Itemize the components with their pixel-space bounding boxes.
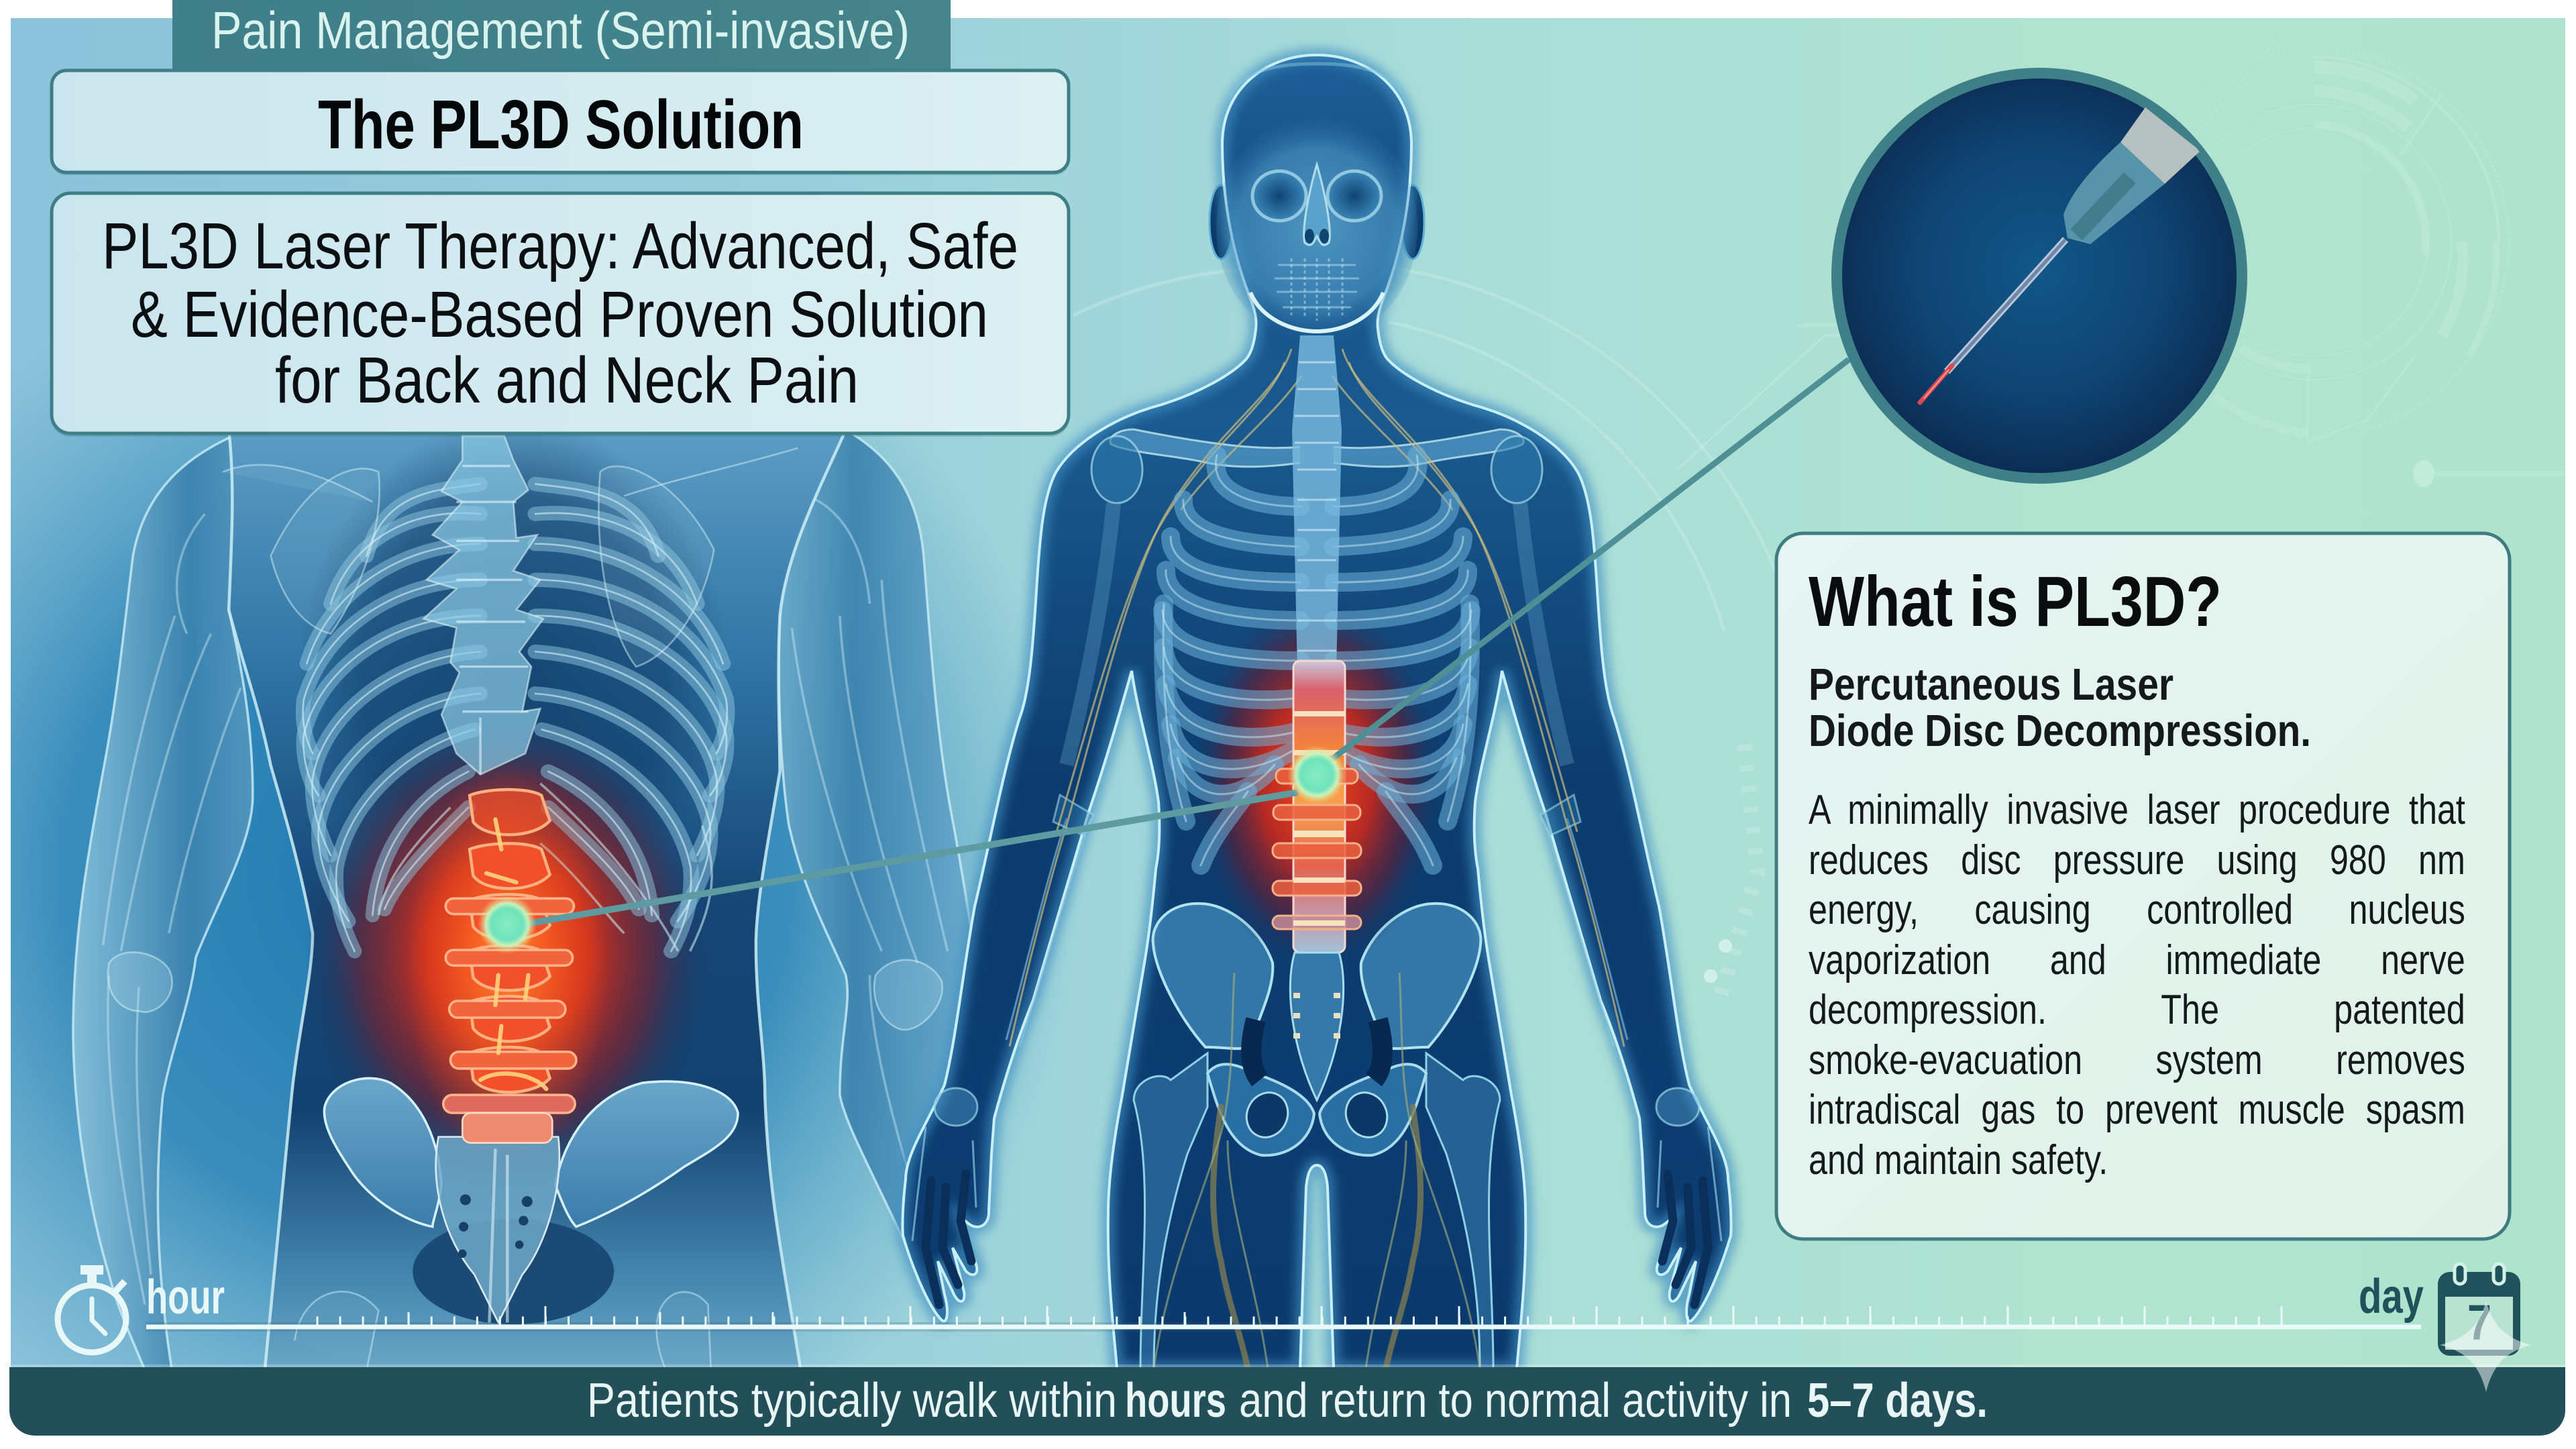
bar message [587, 1374, 1988, 1428]
bar message: and return to normal activity in [1239, 1374, 1792, 1428]
needle lens callout [1837, 73, 2242, 478]
sparkle mark [2440, 1301, 2531, 1392]
lumbar spine orange [405, 759, 609, 1167]
panel subheading: Diode Disc Decompression. [1809, 706, 2311, 756]
thoracic spine [423, 436, 543, 774]
bar message: Patients typically walk within [587, 1374, 1117, 1428]
back-view anatomical figure [73, 418, 983, 1371]
left arm muscle shading [103, 514, 241, 1305]
panel subheading: Percutaneous Laser [1809, 659, 2174, 710]
lower ribs over glow [378, 784, 712, 951]
title: The PL3D Solution [318, 86, 804, 163]
torso [229, 430, 846, 1371]
left arm [72, 436, 254, 1367]
panel body text: vaporization and immediate nerve [1809, 936, 2465, 983]
title panel [51, 70, 1069, 175]
mirrored limb and pelvic bones [912, 349, 1721, 1368]
panel body text: intradiscal gas to prevent muscle spasm [1809, 1087, 2465, 1133]
ribcage [1163, 455, 1471, 865]
hour label: hour [146, 1271, 225, 1324]
cervical and thoracic spine [1292, 335, 1342, 671]
large faint arcs around center figure [1073, 268, 1945, 1087]
panel body text: and maintain safety. [1809, 1136, 2108, 1183]
skull [1216, 64, 1417, 342]
elbow joints [108, 953, 943, 1030]
thoracic spine bones detail [456, 466, 529, 774]
red pain glow front [1193, 594, 1441, 969]
calendar icon [2438, 1264, 2520, 1356]
stopwatch icon [58, 1265, 126, 1352]
category tab [172, 0, 951, 69]
calendar icon: 7 [2467, 1295, 2491, 1350]
hotspot front figure [1287, 745, 1346, 804]
right arm muscle shading [790, 499, 949, 1167]
headline text: for Back and Neck Pain [275, 343, 859, 417]
panel body text: reduces disc pressure using 980 nm [1809, 837, 2465, 883]
pelvis [294, 1078, 738, 1371]
headline text: & Evidence-Based Proven Solution [131, 278, 988, 351]
recovery timeline [146, 1306, 2421, 1327]
panel body text: decompression. The patented [1809, 987, 2465, 1033]
right arm [778, 435, 971, 1244]
panel heading: What is PL3D? [1809, 562, 2222, 641]
panel body text: A minimally invasive laser procedure that [1809, 787, 2465, 833]
connector line from back figure to front figure [523, 792, 1298, 924]
blue glow behind back figure [11, 18, 1352, 1368]
dark chest cavity [315, 435, 712, 822]
hud rings background [1798, 27, 2565, 487]
panel body text: smoke-evacuation system removes [1809, 1037, 2465, 1083]
bottom summary bar [9, 1364, 2565, 1436]
panel body text: energy, causing controlled nucleus [1809, 887, 2465, 933]
front-view anatomical figure [902, 55, 1731, 1368]
pain glow back [309, 735, 692, 1161]
day label: day [2359, 1270, 2424, 1324]
glowing lumbar spine [1273, 661, 1361, 1100]
connector line from front figure to needle lens [1328, 360, 1849, 762]
what is PL3D panel [1776, 533, 2510, 1239]
headline text [102, 209, 1018, 417]
hotspot back figure [478, 895, 537, 954]
panel subheading [1809, 659, 2311, 756]
body silhouette [902, 55, 1731, 1368]
panel body text [1809, 787, 2465, 1183]
headline panel [51, 193, 1069, 437]
headline text: PL3D Laser Therapy: Advanced, Safe [102, 209, 1018, 282]
tab label: Pain Management (Semi-invasive) [211, 1, 910, 60]
scapula and clavicles [223, 448, 798, 667]
bar message: hours [1125, 1374, 1226, 1428]
ears [1210, 185, 1424, 259]
bar message: 5–7 days. [1807, 1374, 1988, 1428]
ribs [303, 484, 727, 951]
